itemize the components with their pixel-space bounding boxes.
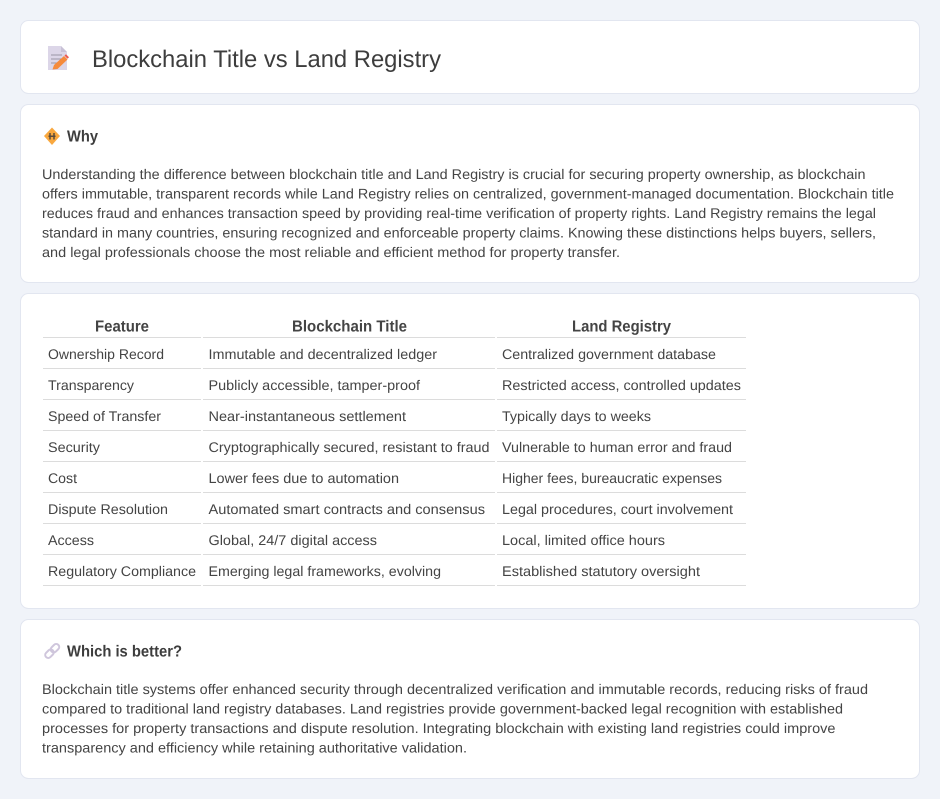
row: dispute resolution: Dispute Resolution (48, 501, 168, 517)
title: Blockchain Title vs Land Registry (92, 46, 441, 73)
row: transparency (48, 377, 741, 393)
icon: warning diamond (44, 128, 60, 145)
row: cost: Lower fees due to automation (208, 470, 399, 486)
row: ownership record: Ownership Record (48, 346, 164, 362)
row: dispute resolution: Automated smart contracts and consensus (208, 501, 485, 517)
row: regulatory compliance (48, 563, 700, 579)
panel: comparison table (20, 294, 920, 608)
row: speed of transfer: Near-instantaneous settlement (208, 408, 406, 424)
row: speed of transfer: Typically days to weeks (502, 408, 651, 424)
table header: Blockchain Title (292, 318, 407, 336)
row: transparency: Transparency (48, 377, 134, 393)
row: dispute resolution: Legal procedures, court involvement (502, 501, 733, 517)
row: regulatory compliance: Emerging legal frameworks, evolving (208, 563, 441, 579)
text block: why paragraph: offers immutable, transparent records while Land Registry relies on centralized, government-managed documentation. Blockchain title (42, 186, 894, 202)
text block: why paragraph: and legal professionals choose the most reliable and efficient method for property transfer. (42, 244, 620, 260)
row: security: Security (48, 439, 100, 455)
row: access: Global, 24/7 digital access (208, 532, 377, 548)
row: ownership record: Centralized government database (502, 346, 716, 362)
heading: why: Why (67, 128, 98, 146)
panel: which is better (20, 620, 920, 778)
row: regulatory compliance: Regulatory Compliance (48, 563, 196, 579)
row: dispute resolution (48, 501, 733, 517)
icon: document with pencil (48, 46, 69, 70)
row: cost (48, 470, 722, 486)
row: regulatory compliance: Established statutory oversight (502, 563, 700, 579)
panel: why (20, 104, 920, 282)
text block: which is better paragraph: compared to traditional land registry databases. Land registries provide government-backed legal recognition with established (42, 700, 843, 716)
text block: which is better paragraph: Blockchain title systems offer enhanced security through decentralized verification and immutable records, reducing risks of fraud (42, 681, 868, 697)
row: speed of transfer (48, 408, 651, 424)
row: cost: Higher fees, bureaucratic expenses (502, 470, 722, 486)
row: access: Local, limited office hours (502, 532, 665, 548)
text block: which is better paragraph: transparency and efficiency while retaining authoritative validation. (42, 740, 467, 756)
row: security: Vulnerable to human error and fraud (502, 439, 732, 455)
row: transparency: Publicly accessible, tamper-proof (208, 377, 420, 393)
row: ownership record: Immutable and decentralized ledger (208, 346, 437, 362)
panel: title header (20, 20, 920, 94)
table header (95, 318, 671, 336)
heading: which is better: Which is better? (67, 644, 182, 660)
row: access: Access (48, 532, 94, 548)
row: cost: Cost (48, 470, 77, 486)
row: transparency: Restricted access, controlled updates (502, 377, 741, 393)
table header: Feature (95, 318, 149, 336)
text block: why paragraph (42, 166, 894, 260)
text block: which is better paragraph (42, 681, 868, 756)
text block: why paragraph: standard in many countries, ensuring recognized and enforceable property claims. Knowing these distinctions helps buyers, sellers, (42, 224, 876, 240)
text block: why paragraph: reduces fraud and enhances transaction speed by providing real-time verification of property rights. Land Registry remains the legal (42, 205, 876, 221)
table header: Land Registry (572, 318, 671, 336)
row: ownership record (48, 346, 716, 362)
row: security (48, 439, 732, 455)
row: security: Cryptographically secured, resistant to fraud (208, 439, 490, 455)
row: speed of transfer: Speed of Transfer (48, 408, 161, 424)
text block: why paragraph: Understanding the difference between blockchain title and Land Registry is crucial for securing property ownership, as blockchain (42, 166, 866, 182)
row: access (48, 532, 665, 548)
icon: chain link (44, 643, 60, 659)
text block: which is better paragraph: processes for property transactions and dispute resolution. Integrating blockchain with existing land registries could improve (42, 720, 836, 736)
